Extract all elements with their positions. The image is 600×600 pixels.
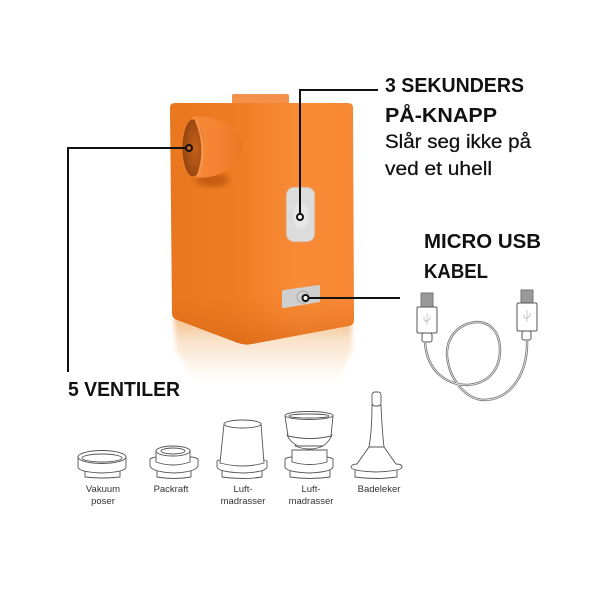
heading: valves: 5 VENTILER	[68, 379, 181, 401]
left plug	[417, 293, 437, 342]
label: madrasser	[289, 496, 333, 507]
top knob	[232, 94, 289, 106]
valve 1: vakuum poser	[78, 450, 126, 507]
label: Luft-	[233, 484, 253, 495]
callout: usb cable: KABEL	[424, 261, 488, 283]
label: poser	[91, 496, 115, 507]
label: Luft-	[301, 484, 321, 495]
valve 3: luftmadrasser	[217, 420, 267, 507]
pump product	[170, 94, 354, 384]
valve 5: badeleker	[351, 392, 402, 495]
valve 4: luftmadrasser	[285, 412, 333, 507]
icon: micro usb cable	[417, 290, 537, 400]
valve 2: packraft	[150, 446, 198, 495]
right plug	[517, 290, 537, 340]
nozzle shadow	[195, 173, 229, 187]
callout: button: PÅ-KNAPP	[385, 103, 497, 127]
callout: usb cable	[424, 231, 541, 283]
callout: button	[385, 75, 531, 180]
callout: button: Slår seg ikke på	[385, 132, 531, 153]
label: Packraft	[154, 484, 189, 495]
leader line: valves	[68, 145, 192, 372]
power button	[286, 187, 315, 242]
usb port plate	[282, 285, 320, 308]
leader line: usb	[302, 295, 400, 301]
label: Vakuum	[86, 484, 120, 495]
label: Badeleker	[358, 484, 400, 495]
callout: usb cable: MICRO USB	[424, 231, 541, 253]
callout: button: ved et uhell	[385, 159, 492, 180]
leader line: button	[297, 90, 378, 220]
air nozzle	[182, 116, 242, 178]
floor reflection	[174, 316, 352, 384]
pump body	[170, 103, 354, 345]
callout: button: 3 SEKUNDERS	[385, 75, 524, 97]
label: madrasser	[221, 496, 265, 507]
cable loop	[425, 322, 527, 400]
